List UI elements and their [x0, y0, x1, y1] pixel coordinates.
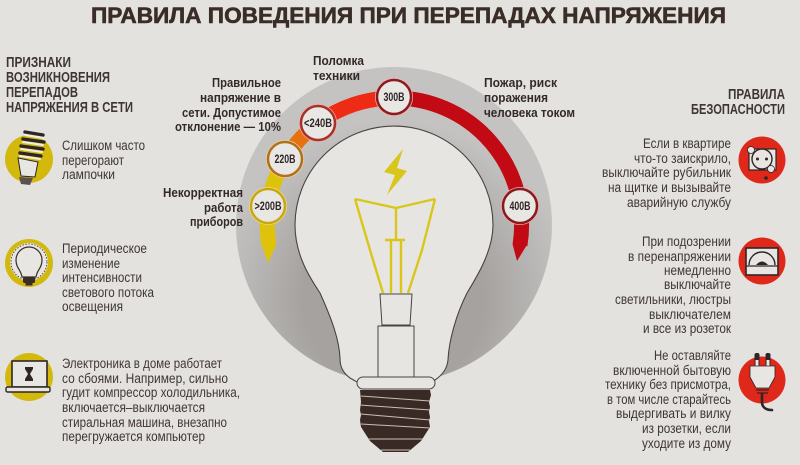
text: bulbs burn out: лампочки	[62, 167, 115, 182]
text: unattended appliances rule: выдергивать и вилку	[616, 406, 731, 421]
heading: signs of voltage drops	[6, 55, 133, 116]
text: light intensity changes: Периодическое	[62, 241, 147, 256]
text: overvoltage rule: светильники, люстры	[615, 292, 731, 307]
label: incorrect device operation: Некорректная	[163, 186, 243, 200]
label: correct voltage	[175, 76, 281, 134]
text: unattended appliances rule	[605, 348, 731, 451]
text: light intensity changes: изменение	[62, 256, 120, 271]
text: overvoltage rule: и все из розеток	[643, 321, 731, 336]
heading: signs of voltage drops: ВОЗНИКНОВЕНИЯ	[6, 70, 110, 86]
text: electronics malfunction: стиральная машина, внезапно	[62, 415, 227, 430]
heading: safety rules	[691, 87, 785, 118]
text: unattended appliances rule: в том числе старайтесь	[607, 392, 731, 407]
text: overvoltage rule: выключайте	[664, 277, 731, 292]
label: fire and shock risk: человека током	[484, 106, 575, 120]
text: unattended appliances rule: Не оставляйте	[654, 348, 731, 363]
heading: safety rules: ПРАВИЛА	[728, 87, 785, 103]
text: light intensity changes: светового потока	[62, 285, 154, 300]
label: equipment breakdown	[313, 54, 365, 83]
grey halo behind bulb	[236, 67, 552, 383]
text: electronics malfunction	[62, 356, 240, 444]
text: electronics malfunction: Электроника в доме работает	[62, 356, 222, 371]
title: ПРАВИЛА ПОВЕДЕНИЯ ПРИ ПЕРЕПАДАХ НАПРЯЖЕНИЯ	[91, 3, 726, 28]
filaments	[355, 199, 435, 293]
text: unattended appliances rule: технику без присмотра,	[605, 377, 731, 392]
text: overvoltage rule: выключателем	[649, 307, 731, 322]
label: correct voltage: напряжение в	[200, 91, 281, 105]
marker: 400 V: 400В	[510, 201, 530, 213]
text: light intensity changes	[62, 241, 154, 314]
collar	[357, 377, 435, 389]
screw base	[360, 390, 431, 452]
label: incorrect device operation: приборов	[190, 215, 243, 229]
label: correct voltage: сети. Допустимое	[182, 106, 281, 120]
icon: spiral bulb	[5, 132, 53, 185]
stem	[380, 294, 412, 325]
icon: sparking socket	[738, 136, 786, 184]
heading: signs of voltage drops: ПЕРЕПАДОВ	[6, 85, 78, 101]
text: unattended appliances rule: уходите из дому	[642, 436, 731, 451]
icon: glowing bulb	[5, 239, 53, 287]
marker: under 240 V	[300, 104, 336, 142]
text: bulbs burn out: перегорают	[62, 153, 124, 168]
text: sparks rule: выключайте рубильник	[602, 165, 731, 180]
text: light intensity changes: интенсивности	[62, 270, 142, 285]
text: overvoltage rule	[615, 234, 731, 336]
text: electronics malfunction: перегружается компьютер	[62, 429, 205, 444]
marker: under 240 V: <240В	[304, 118, 332, 130]
text: electronics malfunction: гудит компрессор холодильника,	[62, 385, 240, 400]
marker: 220 V: 220В	[274, 154, 296, 166]
text: electronics malfunction: со сбоями. Например, сильно	[62, 371, 228, 386]
text: electronics malfunction: включается–выключается	[62, 400, 205, 415]
icon: voltmeter	[738, 238, 786, 284]
text: overvoltage rule: При подозрении	[642, 234, 731, 249]
heading: signs of voltage drops: ПРИЗНАКИ	[6, 55, 71, 71]
marker: 400 V	[502, 188, 538, 224]
label: correct voltage: Правильное	[212, 76, 281, 90]
label: incorrect device operation: работа	[204, 201, 244, 215]
text: sparks rule: Если в квартире	[643, 136, 731, 151]
label: fire and shock risk: поражения	[484, 91, 548, 105]
text: bulbs burn out	[62, 138, 145, 182]
light bulb	[295, 126, 493, 452]
label: equipment breakdown: техники	[313, 69, 360, 83]
icon: laptop with hourglass	[5, 353, 53, 401]
marker: 220 V	[266, 140, 304, 178]
label: fire and shock risk	[484, 76, 575, 120]
heading: signs of voltage drops: НАПРЯЖЕНИЯ В СЕТИ	[6, 100, 133, 116]
marker: over 200 V: >200В	[254, 201, 282, 213]
text: unattended appliances rule: из розетки, если	[642, 421, 731, 436]
label: incorrect device operation	[163, 186, 244, 229]
label: correct voltage: отклонение — 10%	[175, 120, 281, 134]
voltage arc	[262, 98, 528, 263]
icon: power plug	[738, 353, 786, 410]
text: sparks rule	[602, 136, 731, 210]
text: bulbs burn out: Слишком часто	[62, 138, 145, 153]
text: sparks rule: на щитке и вызывайте	[608, 180, 731, 195]
label: fire and shock risk: Пожар, риск	[484, 76, 558, 90]
label: equipment breakdown: Поломка	[313, 54, 365, 68]
text: light intensity changes: освещения	[62, 299, 123, 314]
text: overvoltage rule: в перенапряжении	[628, 249, 731, 264]
text: sparks rule: аварийную службу	[627, 195, 731, 210]
marker: over 200 V	[250, 188, 286, 224]
icon: lightning bolt	[384, 149, 407, 195]
marker: 300 V: 300В	[384, 92, 404, 104]
text: unattended appliances rule: включенной бытовую	[613, 363, 731, 378]
marker: 300 V	[376, 78, 412, 116]
text: overvoltage rule: немедленно	[664, 263, 731, 278]
text: sparks rule: что-то заискрило,	[634, 151, 731, 166]
